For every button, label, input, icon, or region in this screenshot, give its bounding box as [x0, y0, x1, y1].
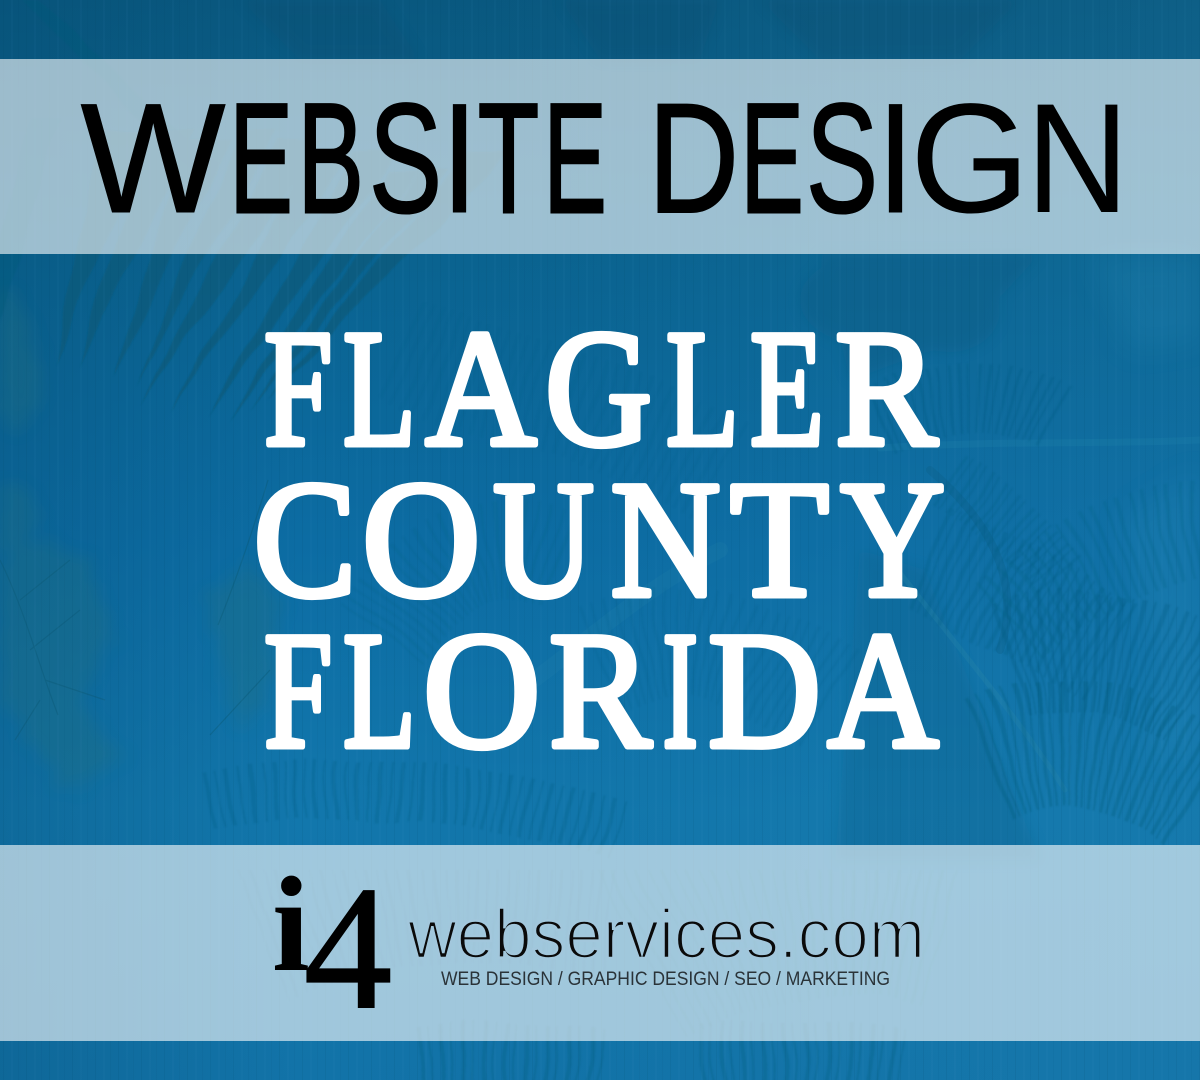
palm trunk	[835, 550, 1040, 860]
logo mark: i4: i	[272, 850, 310, 1000]
headline line: Florida: F	[264, 598, 332, 784]
headline line: County: Y	[840, 448, 945, 632]
dark crown shapes behind the right of the headline	[800, 254, 1040, 380]
heading: website design: I	[441, 72, 478, 246]
heading: website design: B	[298, 72, 364, 246]
heading: website design: D	[648, 72, 739, 246]
headline line: Flagler: G	[545, 296, 652, 482]
logo: i4 webservices.com	[272, 850, 925, 1046]
palm fronds, leaflets from dashed strokes	[210, 350, 1200, 830]
tree foliage on the left	[0, 290, 280, 790]
heading: website design: E	[230, 72, 293, 246]
headline line: County: T	[730, 448, 829, 632]
headline line: County: U	[493, 448, 594, 632]
headline line: County: N	[610, 448, 720, 632]
light patches on the right side	[1090, 254, 1200, 760]
heading: website design: N	[1026, 72, 1129, 246]
heading: website design: E	[544, 72, 607, 246]
heading: website design: E	[741, 72, 804, 246]
headline line: Florida: L	[343, 598, 416, 784]
heading: website design: I	[877, 72, 914, 246]
headline line: Florida: A	[828, 598, 938, 784]
headline line: Florida: I	[662, 598, 698, 784]
tagline: WEB DESIGN / GRAPHIC DESIGN / SEO / MARKETING	[441, 968, 890, 990]
logo wordmark: webservices.com	[407, 895, 925, 973]
heading: website design: S	[806, 72, 878, 246]
tree branches on the left	[0, 480, 270, 740]
headline line: County: O	[362, 448, 480, 632]
headline line: Flagler: R	[835, 296, 938, 482]
headline: location	[254, 296, 945, 784]
palm stems	[520, 440, 1200, 790]
heading: website design: T	[478, 72, 539, 246]
heading: website design: G	[910, 72, 1030, 246]
top-left palm leaflets	[0, 0, 510, 425]
bottom translucent band	[0, 845, 1200, 1041]
headline line: Flagler: L	[666, 296, 739, 482]
heading: website design: S	[369, 72, 442, 246]
heading: website design: W	[81, 72, 226, 246]
logo mark: i4: 4	[304, 851, 392, 1046]
headline line: Flagler: F	[264, 296, 332, 482]
headline line: Flagler: E	[750, 296, 824, 482]
headline line: Florida: O	[423, 598, 540, 784]
top-strip palm fronds	[240, 0, 1020, 60]
headline line: Flagler: L	[343, 296, 416, 482]
headline line: Florida: D	[708, 598, 821, 784]
headline line: Florida: R	[549, 598, 652, 784]
top translucent band	[0, 59, 1200, 254]
headline line: County: C	[254, 448, 356, 632]
palm fronds hanging through the bottom band	[260, 888, 950, 1065]
headline line: Flagler: A	[426, 296, 536, 482]
